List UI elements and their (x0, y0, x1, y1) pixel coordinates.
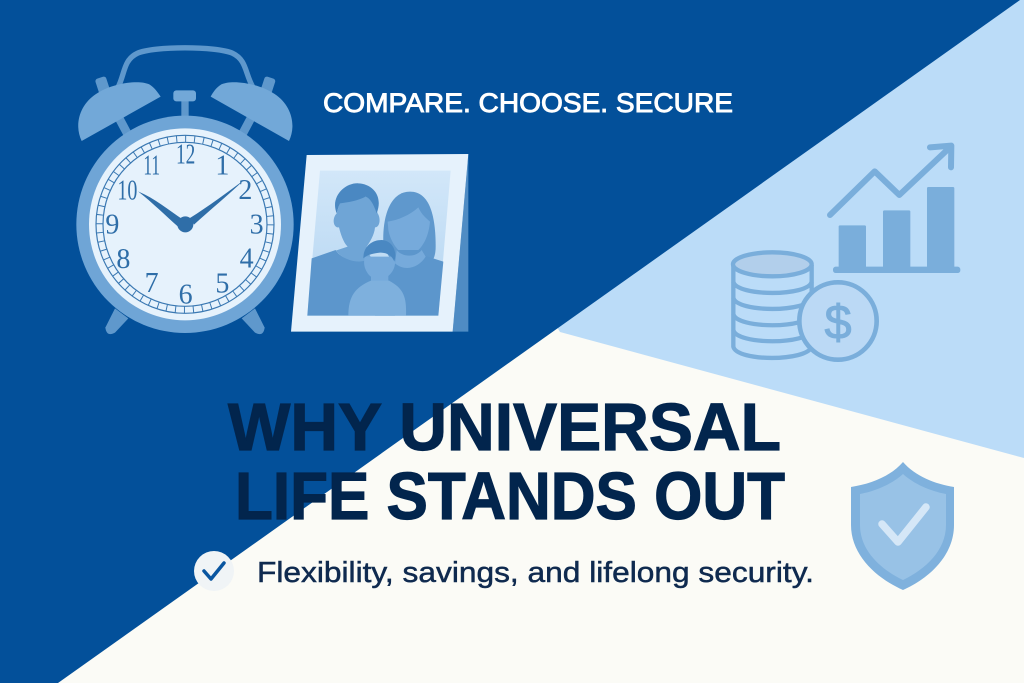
icon: growth chart (830, 146, 960, 273)
shield inner (860, 474, 946, 580)
icon: coin stack and dollar coin (733, 252, 877, 360)
icon: check badge (194, 551, 234, 591)
clock numerals: 8 (116, 244, 130, 275)
icon: shield (851, 462, 954, 590)
coin stack (733, 252, 812, 358)
background: light blue panel (540, 0, 1024, 458)
subtitle: Flexibility, savings, and lifelong security. (257, 557, 814, 589)
chart baseline (833, 267, 960, 273)
clock left bell (78, 82, 161, 141)
dollar sign: $ (824, 295, 852, 349)
clock right bell (211, 82, 292, 141)
photo background (307, 171, 451, 316)
shield outer (851, 462, 954, 590)
clock tick ring (96, 135, 274, 313)
clock numerals: 10 (117, 175, 137, 206)
chart bars (839, 225, 866, 269)
clock numerals: 4 (240, 244, 254, 275)
frame stand (453, 154, 468, 332)
icon: family photo frame (291, 154, 468, 332)
clock numerals: 2 (238, 175, 252, 206)
man (307, 183, 395, 316)
clock numerals: 1 (215, 150, 229, 181)
clock bell pegs (95, 76, 276, 334)
clock numerals: 12 (176, 139, 195, 170)
clock body (76, 116, 294, 333)
clock numerals: 11 (143, 150, 160, 181)
clock numerals (105, 139, 264, 310)
title line 2: LIFE STANDS OUT (235, 459, 785, 534)
shield check (882, 507, 926, 542)
clock numerals: 5 (215, 269, 229, 300)
chart trend arrow (830, 146, 951, 215)
clock handle (118, 48, 253, 87)
clock face (89, 128, 281, 320)
child (348, 240, 406, 316)
frame (291, 154, 468, 332)
clock numerals: 6 (179, 279, 193, 310)
tagline: COMPARE. CHOOSE. SECURE (323, 88, 733, 118)
dollar coin (799, 282, 877, 360)
clock numerals: 7 (145, 268, 159, 299)
clock numerals: 3 (250, 209, 264, 240)
clock top button (173, 90, 196, 101)
title (228, 390, 785, 534)
icon: alarm clock (76, 48, 294, 334)
title line 1: WHY UNIVERSAL (228, 390, 781, 465)
clock hands (138, 180, 244, 232)
woman (375, 192, 443, 316)
clock numerals: 9 (105, 209, 119, 240)
